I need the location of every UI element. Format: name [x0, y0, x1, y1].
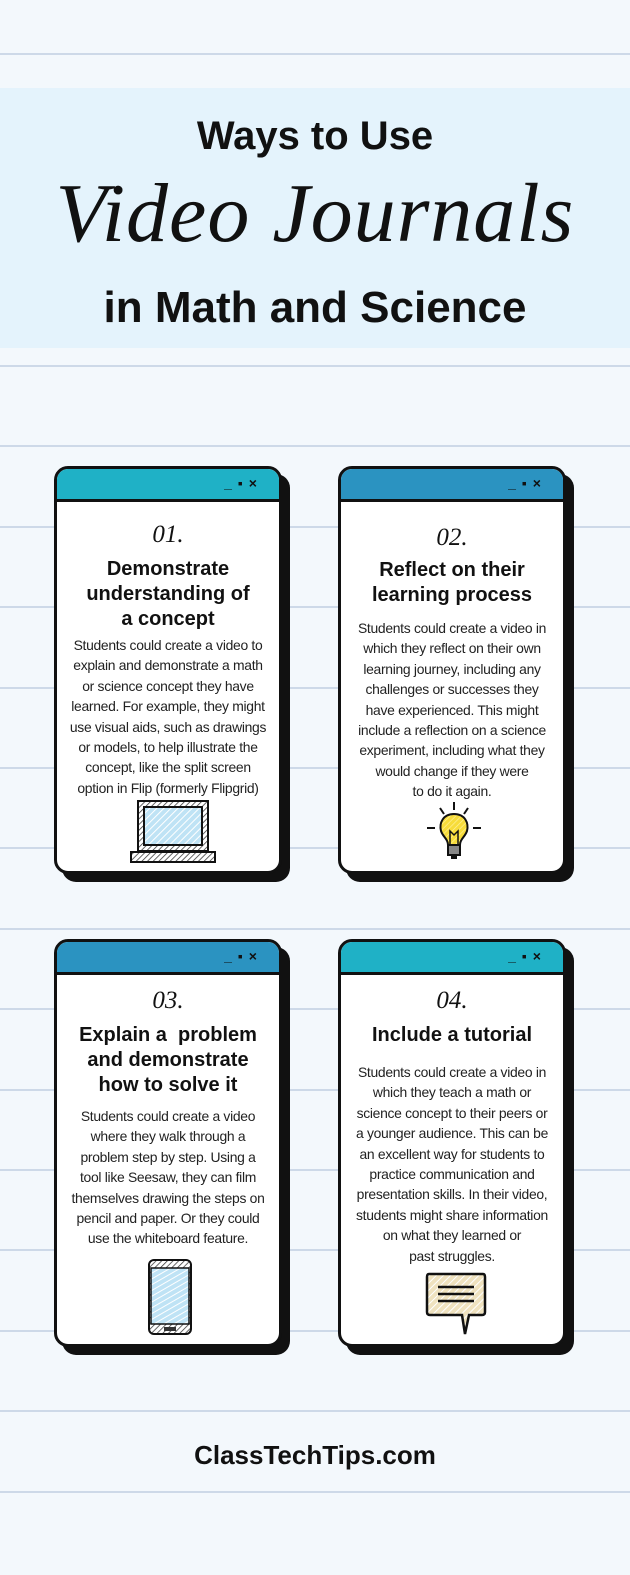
body text: problem step by step. Using a	[80, 1149, 256, 1165]
title bar	[57, 469, 279, 502]
title bar	[341, 942, 563, 975]
body text: Students could create a video	[81, 1108, 255, 1124]
panel: card 4	[338, 939, 566, 1347]
body text: use the whiteboard feature.	[88, 1230, 248, 1246]
title: in Math and Science: in Math and Science	[104, 283, 526, 332]
title bar: _▪×	[224, 948, 263, 964]
body text: have experienced. This might	[366, 702, 538, 718]
body text: practice communication and	[369, 1166, 535, 1182]
body text	[356, 1064, 548, 1264]
heading: how to solve it	[99, 1074, 237, 1096]
body text: would change if they were	[375, 763, 529, 779]
body text: an excellent way for students to	[360, 1146, 544, 1162]
heading: Include a tutorial	[372, 1024, 532, 1046]
title bar: _▪×	[224, 475, 263, 491]
title bar	[341, 469, 563, 502]
body text: to do it again.	[413, 783, 491, 799]
icon: phone	[148, 1259, 192, 1335]
icon: light bulb	[427, 802, 481, 859]
heading: Explain a problem	[79, 1024, 257, 1046]
body text: or models, to help illustrate the	[78, 739, 258, 755]
body text	[70, 637, 266, 796]
title band	[0, 88, 630, 348]
heading	[86, 558, 250, 630]
body text: option in Flip (formerly Flipgrid)	[77, 780, 259, 796]
body text: learning journey, including any	[363, 661, 541, 677]
body text: past struggles.	[409, 1248, 495, 1264]
icon: speech bubble	[426, 1272, 486, 1334]
panel: card 3	[54, 939, 282, 1347]
title bar: _▪×	[508, 475, 547, 491]
icon: laptop	[130, 800, 216, 863]
panel: card 1	[54, 466, 282, 874]
body text: presentation skills. In their video,	[357, 1186, 547, 1202]
body text: pencil and paper. Or they could	[76, 1210, 259, 1226]
body text	[72, 1108, 264, 1246]
body text: Students could create a video in	[358, 620, 546, 636]
body text: where they walk through a	[91, 1128, 245, 1144]
body text: Students could create a video to	[74, 637, 262, 653]
body text: a younger audience. This can be	[356, 1125, 548, 1141]
body text: students might share information	[356, 1207, 548, 1223]
body text: or science concept they have	[82, 678, 254, 694]
body text: experiment, including what they	[359, 742, 545, 758]
number 03: 03.	[152, 987, 184, 1014]
title bar: _▪×	[508, 948, 547, 964]
body text: challenges or successes they	[365, 681, 539, 697]
number 04: 04.	[436, 987, 468, 1014]
heading	[79, 1024, 257, 1096]
body text: themselves drawing the steps on	[72, 1190, 264, 1206]
body text: which they teach a math or	[373, 1084, 531, 1100]
body text: concept, like the split screen	[85, 759, 251, 775]
heading: understanding of	[86, 583, 250, 605]
heading: Demonstrate	[107, 558, 229, 580]
body text: which they reflect on their own	[363, 640, 541, 656]
title bar	[57, 942, 279, 975]
body text: on what they learned or	[383, 1227, 521, 1243]
number 02: 02.	[436, 524, 468, 551]
footer: ClassTechTips.com	[194, 1440, 436, 1470]
body text	[358, 620, 546, 799]
number 01: 01.	[152, 521, 184, 548]
body text: tool like Seesaw, they can film	[80, 1169, 256, 1185]
title: Video Journals: Video Journals	[56, 167, 574, 260]
panel: card 2	[338, 466, 566, 874]
body text: include a reflection on a science	[358, 722, 546, 738]
body text: learned. For example, they might	[71, 698, 265, 714]
title: Ways to Use: Ways to Use	[197, 114, 433, 158]
heading: learning process	[372, 584, 532, 606]
heading	[372, 559, 532, 606]
heading: a concept	[121, 608, 215, 630]
body text: use visual aids, such as drawings	[70, 719, 266, 735]
body text: science concept to their peers or	[357, 1105, 547, 1121]
heading: and demonstrate	[87, 1049, 249, 1071]
body text: explain and demonstrate a math	[73, 657, 263, 673]
body text: Students could create a video in	[358, 1064, 546, 1080]
heading: Reflect on their	[379, 559, 525, 581]
